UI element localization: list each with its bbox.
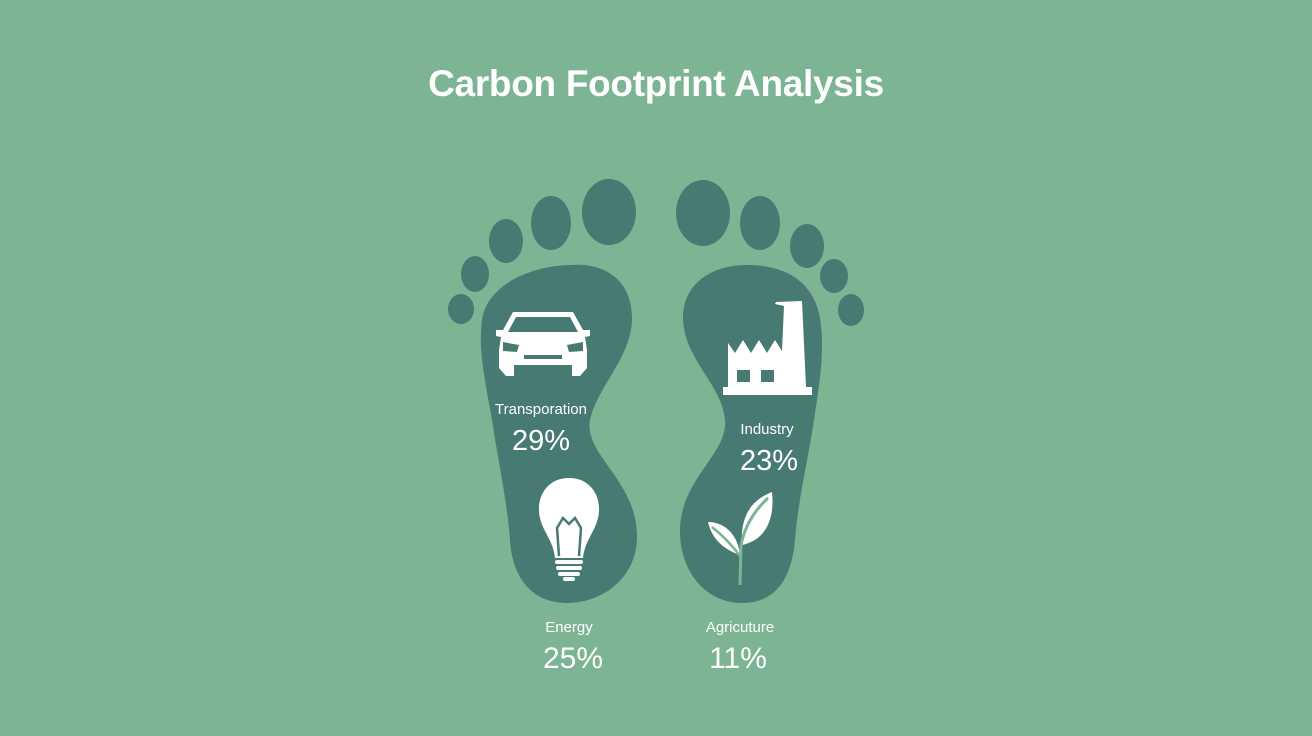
icon: leaf <box>708 492 773 585</box>
title: Carbon Footprint Analysis <box>428 63 884 104</box>
icon: light bulb <box>539 478 599 581</box>
label: transportation <box>495 401 587 457</box>
icon: car <box>496 312 590 376</box>
right footprint <box>676 180 864 603</box>
left footprint <box>448 179 637 603</box>
label: energy: Energy <box>545 619 593 636</box>
label: transportation: 29% <box>512 425 570 457</box>
label: energy: 25% <box>543 642 603 675</box>
label: agriculture: Agricuture <box>706 619 774 636</box>
label: industry: 23% <box>740 445 798 477</box>
label: agriculture <box>706 619 774 675</box>
icon: factory <box>723 301 812 395</box>
label: energy <box>543 619 603 675</box>
label: transportation: Transporation <box>495 401 587 418</box>
label: industry: Industry <box>740 421 794 438</box>
label: industry <box>740 421 798 477</box>
label: agriculture: 11% <box>709 642 767 675</box>
